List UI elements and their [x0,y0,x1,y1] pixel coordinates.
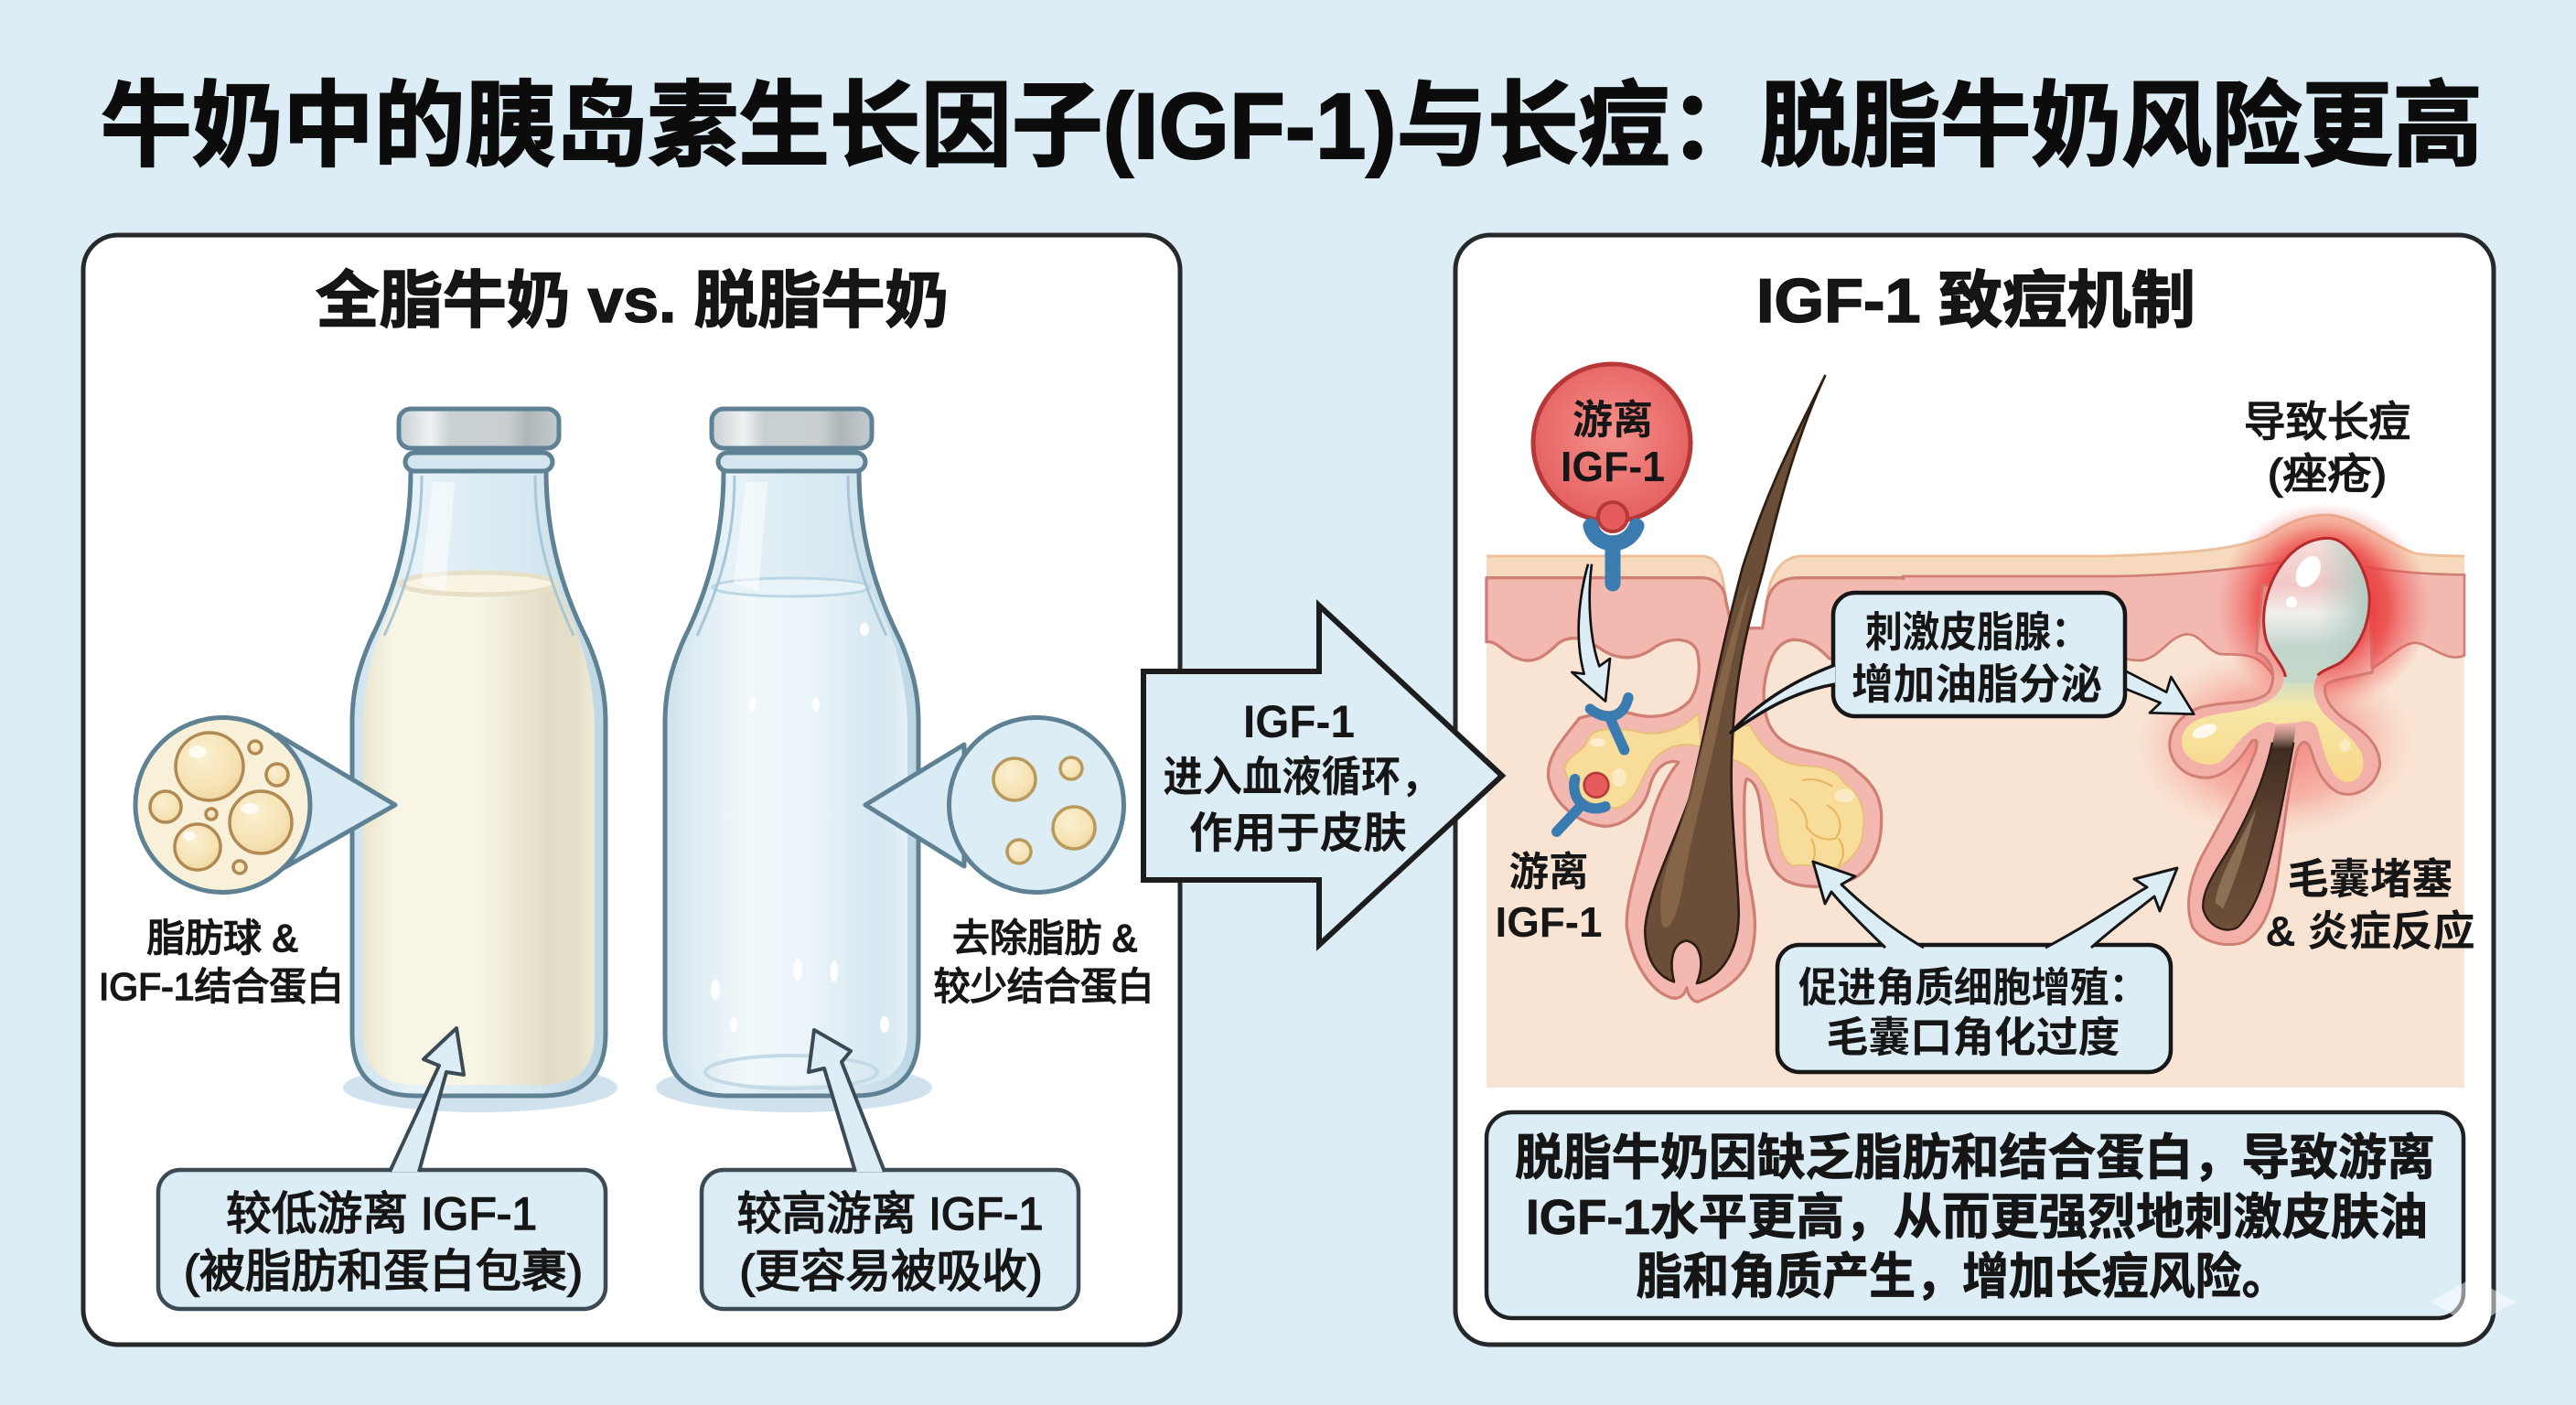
callout: sebaceous gland stimulation: 刺激皮脂腺： [1865,608,2088,656]
label: blockage and inflammation: & 炎症反应 [2265,907,2475,955]
label: fat globules [99,917,344,1008]
arrow: circulating IGF-1 to receptor [1572,564,1610,702]
label: free IGF-1 at gland [1495,850,1603,946]
left dermis and hair follicle [1487,376,1904,1002]
callout: keratinocyte proliferation: 毛囊口角化过度 [1826,1014,2120,1061]
callout: lower free IGF-1 [158,1028,606,1309]
label: blockage and inflammation: 毛囊堵塞 [2287,855,2453,903]
hair shaft [1645,376,1825,983]
bottle: whole milk [352,409,606,1096]
receptor: gland top [1590,698,1628,750]
watermark star [2430,1278,2517,1328]
bottle shadow: skim milk [656,1063,932,1112]
panel: whole vs skim milk [83,235,1180,1345]
bottle shadow: whole milk [343,1063,617,1112]
label: causes acne [2244,398,2410,498]
label: causes acne: (痤疮) [2268,450,2387,498]
magnifier: fat globules [135,717,395,893]
callout: higher free IGF-1: 较高游离 IGF-1 [737,1188,1043,1239]
label: reduced fat: 较少结合蛋白 [933,965,1154,1008]
label: reduced fat [933,917,1154,1008]
summary box: IGF-1水平更高，从而更强烈地刺激皮肤油 [1526,1190,2428,1245]
callout: sebaceous gland stimulation: 增加油脂分泌 [1852,660,2102,708]
clogged hair [2203,724,2296,930]
arrow: IGF-1 enters bloodstream [1143,606,1502,945]
inflammation glow [2216,503,2431,711]
label: free IGF-1 at gland: IGF-1 [1495,898,1603,946]
title: 牛奶中的胰岛素生长因子(IGF-1)与长痘： [101,74,1761,178]
label: causes acne: 导致长痘 [2244,398,2410,445]
summary box [1487,1112,2463,1318]
label: reduced fat: 去除脂肪 & [952,917,1137,960]
label: fat globules: IGF-1结合蛋白 [99,965,344,1008]
callout: keratinocyte proliferation [1777,862,2177,1072]
label: circulating free IGF-1 [1533,364,1690,584]
sheath and dermis [1487,578,1904,1002]
summary box: 脱脂牛奶因缺乏脂肪和结合蛋白，导致游离 [1515,1131,2435,1185]
panel: IGF-1 acne mechanism [1455,235,2494,1345]
bottle: skim milk [665,409,918,1096]
panel frame [83,235,1180,1345]
arrow: sebum to pimple [2122,670,2194,714]
pimple head [2264,538,2369,683]
right dermis and inflamed follicle [1903,503,2464,945]
arrow: to gland [1813,862,1924,948]
callout: higher free IGF-1: (更容易被吸收) [739,1246,1043,1297]
arrow: IGF-1 enters bloodstream: IGF-1 [1243,696,1355,747]
magnifier: reduced fat [865,717,1123,893]
label: fat globules: 脂肪球 & [146,917,298,960]
follicle sheath [2170,585,2380,945]
dermis seam patch [1889,580,1916,596]
panel frame [1455,235,2494,1345]
callout: lower free IGF-1: (被脂肪和蛋白包裹) [184,1246,583,1297]
arrow: IGF-1 enters bloodstream: 进入血液循环， [1164,753,1440,800]
label: blockage and inflammation [2265,855,2475,955]
summary box: 脂和角质产生，增加长痘风险。 [1636,1249,2289,1304]
sebum gland [2182,677,2363,782]
title: 脱脂牛奶风险更高 [1760,74,2483,178]
sebaceous gland left [1564,713,1701,808]
skin base layer [1487,515,2464,1088]
callout: higher free IGF-1 [702,1030,1079,1309]
panel heading: 全脂牛奶 vs. 脱脂牛奶 [316,266,949,336]
label: circulating free IGF-1: 游离 [1572,398,1653,443]
panel heading: IGF-1 致痘机制 [1756,266,2195,336]
sebaceous gland right [1732,725,1863,868]
label: circulating free IGF-1: IGF-1 [1561,443,1665,490]
arrow: to clogged follicle [2045,868,2177,948]
receptor with bound IGF-1 [1557,773,1608,831]
label: free IGF-1 at gland: 游离 [1509,850,1588,895]
callout: keratinocyte proliferation: 促进角质细胞增殖： [1798,964,2148,1011]
callout: lower free IGF-1: 较低游离 IGF-1 [226,1188,537,1239]
callout: sebaceous gland stimulation [1731,593,2125,733]
skin cross-section diagram [1487,364,2475,1088]
arrow: IGF-1 enters bloodstream: 作用于皮肤 [1189,809,1407,857]
